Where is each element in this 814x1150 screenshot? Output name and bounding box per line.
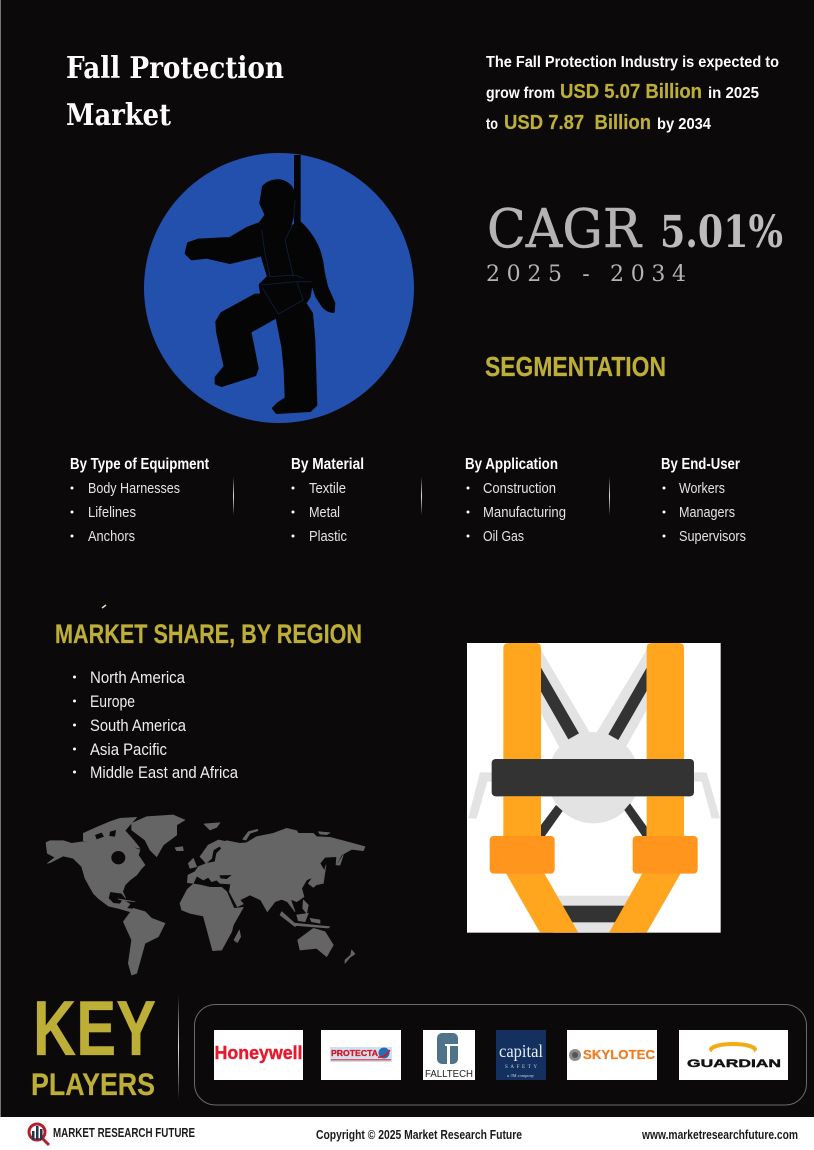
- CAGR: 2025 - 2034: [486, 262, 686, 287]
- market forecast text: USD 5.07 Billion: [560, 81, 702, 103]
- logo: FallTech: FALLTECH: [425, 1068, 473, 1080]
- segment: by application: Manufacturing: [483, 504, 566, 521]
- market forecast text: to: [486, 116, 498, 133]
- region list: Asia Pacific: [90, 740, 167, 759]
- segment: by end-user: [661, 456, 746, 545]
- segment: by application: Oil Gas: [483, 528, 524, 545]
- region list: Middle East and Africa: [90, 763, 238, 782]
- CAGR: 5.01%: [660, 207, 783, 258]
- logo: Capital Safety: a 3M company: [507, 1073, 534, 1078]
- CAGR: [486, 199, 783, 287]
- segment: by type of equipment: [70, 456, 210, 545]
- segment: by end-user: By End-User: [661, 456, 740, 473]
- segment: by type of equipment: Anchors: [88, 528, 135, 545]
- segment: by type of equipment: By Type of Equipment: [70, 456, 210, 473]
- region list: North America: [90, 668, 185, 687]
- segment: by end-user: Workers: [679, 480, 725, 497]
- region list: [73, 668, 238, 782]
- segment: by material: By Material: [291, 456, 364, 473]
- market forecast text: USD 7.87 Billion: [504, 112, 651, 134]
- segment: by material: Plastic: [309, 528, 347, 545]
- segment: by type of equipment: Lifelines: [88, 504, 136, 521]
- segment: by material: Metal: [309, 504, 340, 521]
- logo: FallTech: [423, 1030, 475, 1080]
- segment: by application: By Application: [465, 456, 558, 473]
- logo: Skylotec: [567, 1030, 657, 1080]
- title: Fall Protection: [66, 51, 284, 86]
- logo: Capital Safety: [496, 1030, 546, 1080]
- icon: market research future logo: [29, 1124, 49, 1145]
- title: Market: [66, 98, 171, 133]
- segment: by material: [291, 456, 364, 545]
- icon: worker in harness on blue circle: [144, 153, 414, 423]
- region list: Europe: [90, 692, 135, 711]
- market forecast text: by 2034: [657, 116, 711, 133]
- logo: Protecta: [321, 1030, 401, 1080]
- footer: [0, 1117, 814, 1150]
- segment: by end-user: Managers: [679, 504, 735, 521]
- segment: by application: Construction: [483, 480, 556, 497]
- key players heading: KEY: [33, 984, 156, 1072]
- market forecast text: [486, 54, 779, 134]
- heading: market share by region: MARKET SHARE, BY REGION: [55, 619, 362, 649]
- logo: Protecta: PROTECTA: [331, 1048, 378, 1058]
- segment: by end-user: Supervisors: [679, 528, 746, 545]
- logo: Capital Safety: SAFETY: [505, 1065, 537, 1070]
- panel: key players logos: [194, 1004, 806, 1105]
- CAGR: CAGR: [487, 199, 643, 260]
- logo: Honeywell: [214, 1030, 303, 1080]
- segment: by type of equipment: Body Harnesses: [88, 480, 180, 497]
- key players heading: PLAYERS: [31, 1066, 155, 1102]
- segment: by material: Textile: [309, 480, 346, 497]
- logo: Guardian: GUARDIAN: [687, 1058, 781, 1070]
- segment: by application: [465, 456, 566, 545]
- region list: South America: [90, 716, 186, 735]
- market forecast text: in 2025: [708, 85, 759, 102]
- logo: Skylotec: SKYLOTEC: [583, 1048, 655, 1062]
- heading: segmentation: SEGMENTATION: [485, 351, 666, 382]
- illustration: safety harness: [467, 643, 721, 933]
- copyright: Copyright © 2025 Market Research Future: [316, 1127, 522, 1142]
- logo: Capital Safety: capital: [499, 1041, 543, 1061]
- footer brand name: MARKET RESEARCH FUTURE: [53, 1125, 195, 1140]
- world map: [46, 815, 365, 975]
- logo: Guardian: [679, 1030, 788, 1080]
- key players heading: [31, 984, 156, 1102]
- title: [66, 51, 284, 133]
- logo: Honeywell: Honeywell: [214, 1043, 302, 1063]
- market forecast text: grow from: [486, 85, 555, 102]
- market forecast text: The Fall Protection Industry is expected to: [486, 54, 779, 71]
